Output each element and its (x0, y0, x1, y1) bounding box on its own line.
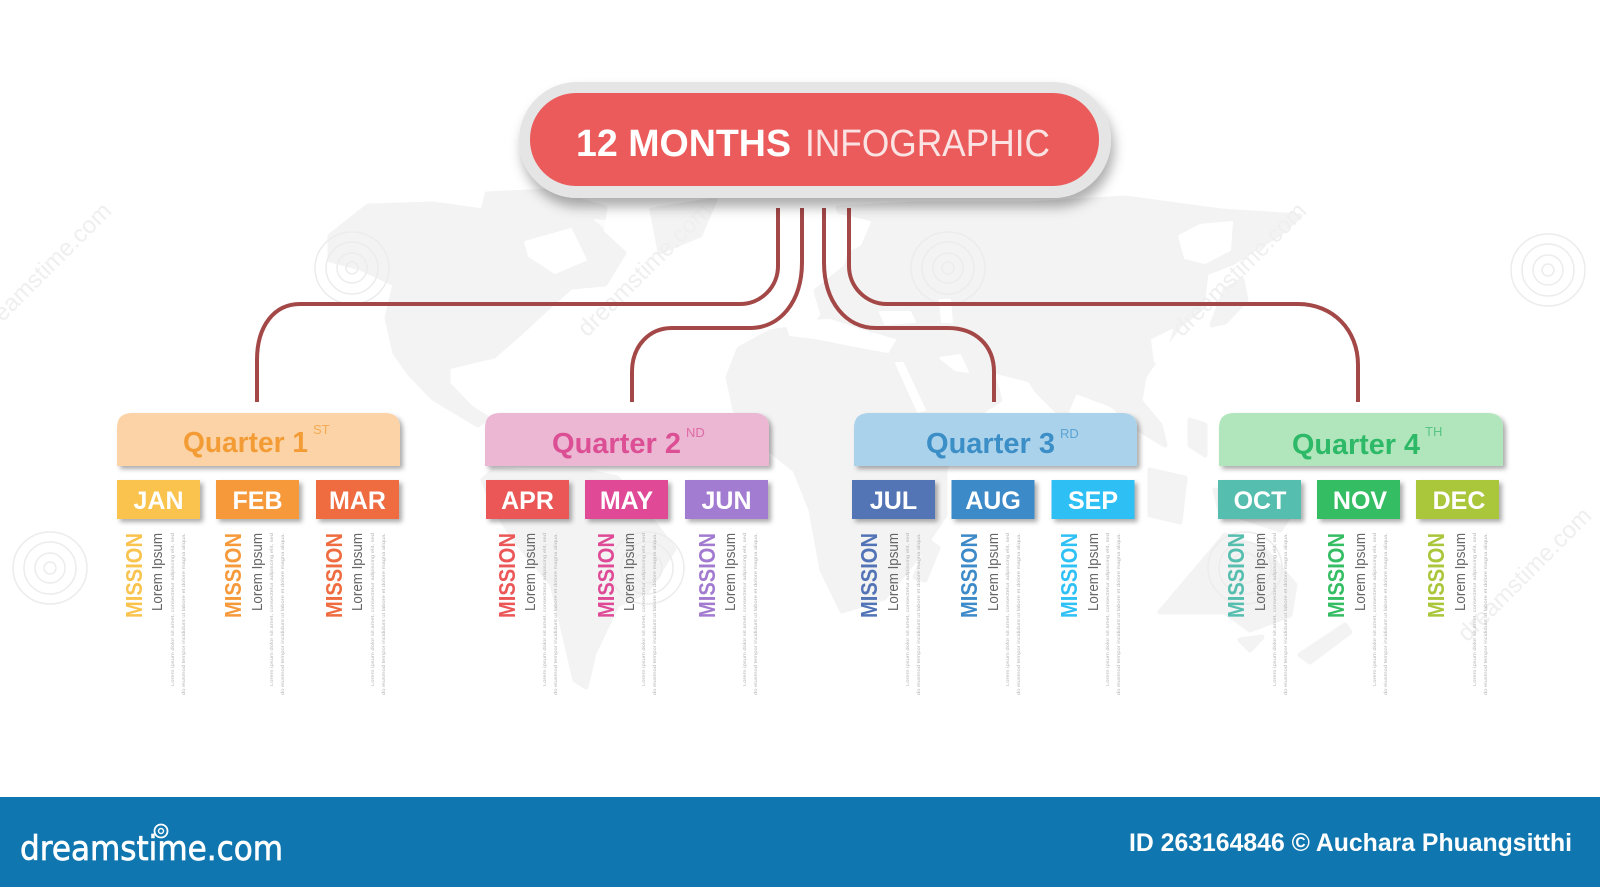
month: MAR (316, 480, 399, 695)
month: JUN: do eiusmod tempor incididunt ut labore et dolore magna aliqua. (753, 533, 758, 695)
panel: quarter 1 (117, 413, 400, 695)
month: JUN: JUN (701, 487, 752, 515)
heading: quarter 3: Quarter 3 (926, 428, 1055, 460)
month: JUL: Lorem Ipsum (886, 533, 902, 611)
month: MAY (585, 480, 668, 695)
month: SEP: SEP (1068, 487, 1118, 515)
world map background (330, 191, 1350, 687)
month: JAN: Lorem Ipsum (150, 533, 166, 611)
heading: quarter 4 (1219, 413, 1503, 466)
month: APR: do eiusmod tempor incididunt ut labore et dolore magna aliqua. (553, 533, 558, 695)
month: JUL: JUL (870, 487, 917, 515)
month: DEC (1416, 480, 1499, 695)
heading: quarter 2 (485, 413, 769, 466)
heading: quarter 3 (854, 413, 1137, 466)
watermark text (0, 197, 1597, 647)
title text: INFOGRAPHIC (805, 123, 1050, 165)
month: JUN: MISSION (694, 533, 720, 618)
month: FEB: FEB (232, 487, 282, 515)
month: JUL: Lorem ipsum dolor sit amet, consectetur adipiscing elit, sed (905, 532, 910, 686)
watermark spirals (13, 232, 1585, 604)
panel: quarter 4 (1218, 413, 1503, 695)
month: OCT (1218, 480, 1301, 695)
heading: quarter 2: ND (686, 425, 705, 440)
month: DEC: MISSION (1423, 533, 1449, 618)
watermark text: dreamstime.com (1167, 197, 1312, 342)
month: AUG (952, 480, 1034, 695)
month: JUL (852, 480, 935, 695)
month: FEB (216, 480, 299, 695)
month: MAY: do eiusmod tempor incididunt ut labore et dolore magna aliqua. (652, 533, 657, 695)
heading: quarter 4: TH (1425, 424, 1442, 439)
month: JUL: do eiusmod tempor incididunt ut labore et dolore magna aliqua. (916, 533, 921, 695)
month: JUN (685, 480, 768, 695)
heading: quarter 1 (117, 413, 400, 466)
month: APR: MISSION (494, 533, 520, 618)
month: JAN (117, 480, 200, 695)
month: NOV: MISSION (1323, 533, 1349, 618)
month: NOV (1317, 480, 1400, 695)
month: FEB: Lorem ipsum dolor sit amet, consectetur adipiscing elit, sed (269, 532, 274, 686)
footer logo: dreamstime.com (20, 829, 283, 869)
month: JAN: Lorem ipsum dolor sit amet, consectetur adipiscing elit, sed (170, 532, 175, 686)
panel: quarter 2 (485, 413, 769, 695)
month: NOV: Lorem ipsum dolor sit amet, consectetur adipiscing elit, sed (1372, 532, 1377, 686)
month: DEC: DEC (1433, 487, 1485, 515)
watermark text: dreamstime.com (572, 197, 717, 342)
heading: quarter 1: Quarter 1 (183, 427, 308, 459)
month: APR (486, 480, 569, 695)
month: AUG: MISSION (956, 533, 982, 618)
heading: quarter 3: RD (1060, 426, 1079, 441)
connector lines (257, 208, 1358, 402)
month: FEB: Lorem Ipsum (250, 533, 266, 611)
heading: quarter 4: Quarter 4 (1292, 429, 1420, 461)
month: NOV: Lorem Ipsum (1353, 533, 1369, 611)
month: SEP (1052, 480, 1134, 695)
footer bar (0, 797, 1600, 887)
month: DEC: do eiusmod tempor incididunt ut labore et dolore magna aliqua. (1483, 533, 1488, 695)
month: APR: APR (501, 487, 554, 515)
month: AUG: Lorem ipsum dolor sit amet, consectetur adipiscing elit, sed (1005, 532, 1010, 686)
month: OCT: OCT (1234, 487, 1286, 515)
panel: quarter 3 (852, 413, 1137, 695)
month: SEP: MISSION (1056, 533, 1082, 618)
heading: quarter 2: Quarter 2 (552, 428, 681, 460)
month: APR: Lorem ipsum dolor sit amet, consectetur adipiscing elit, sed (542, 532, 547, 686)
month: SEP: do eiusmod tempor incididunt ut labore et dolore magna aliqua. (1116, 533, 1121, 695)
month: DEC: Lorem Ipsum (1453, 533, 1469, 611)
month: JAN: JAN (133, 487, 184, 515)
month: JUN: Lorem ipsum dolor sit amet, consectetur adipiscing elit, sed (742, 532, 747, 686)
heading: quarter 1: ST (313, 422, 330, 437)
month: APR: Lorem Ipsum (523, 533, 539, 611)
month: MAR: MISSION (321, 533, 347, 618)
month: SEP: Lorem Ipsum (1086, 533, 1102, 611)
month: FEB: do eiusmod tempor incididunt ut labore et dolore magna aliqua. (280, 533, 285, 695)
month: DEC: Lorem ipsum dolor sit amet, consectetur adipiscing elit, sed (1472, 532, 1477, 686)
month: NOV: do eiusmod tempor incididunt ut labore et dolore magna aliqua. (1383, 533, 1388, 695)
month: AUG: Lorem Ipsum (986, 533, 1002, 611)
month: AUG: AUG (965, 487, 1021, 515)
month: AUG: do eiusmod tempor incididunt ut labore et dolore magna aliqua. (1016, 533, 1021, 695)
footer credit: ID 263164846 © Auchara Phuangsitthi (1129, 829, 1572, 857)
month: JUL: MISSION (856, 533, 882, 618)
month: MAY: MAY (600, 487, 653, 515)
month: SEP: Lorem ipsum dolor sit amet, consectetur adipiscing elit, sed (1105, 532, 1110, 686)
title text: 12 MONTHS (576, 123, 791, 165)
watermark text: dreamstime.com (1452, 502, 1597, 647)
month: OCT: do eiusmod tempor incididunt ut labore et dolore magna aliqua. (1283, 533, 1288, 695)
month: NOV: NOV (1333, 487, 1387, 515)
month: MAY: Lorem Ipsum (622, 533, 638, 611)
month: MAR: Lorem Ipsum (350, 533, 366, 611)
month: JUN: Lorem Ipsum (723, 533, 739, 611)
month: MAR: Lorem ipsum dolor sit amet, consectetur adipiscing elit, sed (370, 532, 375, 686)
title pill (519, 82, 1111, 198)
month: JAN: do eiusmod tempor incididunt ut labore et dolore magna aliqua. (181, 533, 186, 695)
month: OCT: Lorem Ipsum (1253, 533, 1269, 611)
month: OCT: Lorem ipsum dolor sit amet, consectetur adipiscing elit, sed (1272, 532, 1277, 686)
month: MAR: MAR (329, 487, 386, 515)
month: MAY: Lorem ipsum dolor sit amet, consectetur adipiscing elit, sed (641, 532, 646, 686)
month: OCT: MISSION (1223, 533, 1249, 618)
month: MAR: do eiusmod tempor incididunt ut labore et dolore magna aliqua. (381, 533, 386, 695)
month: JAN: MISSION (121, 533, 147, 618)
month: MAY: MISSION (593, 533, 619, 618)
month: FEB: MISSION (220, 533, 246, 618)
